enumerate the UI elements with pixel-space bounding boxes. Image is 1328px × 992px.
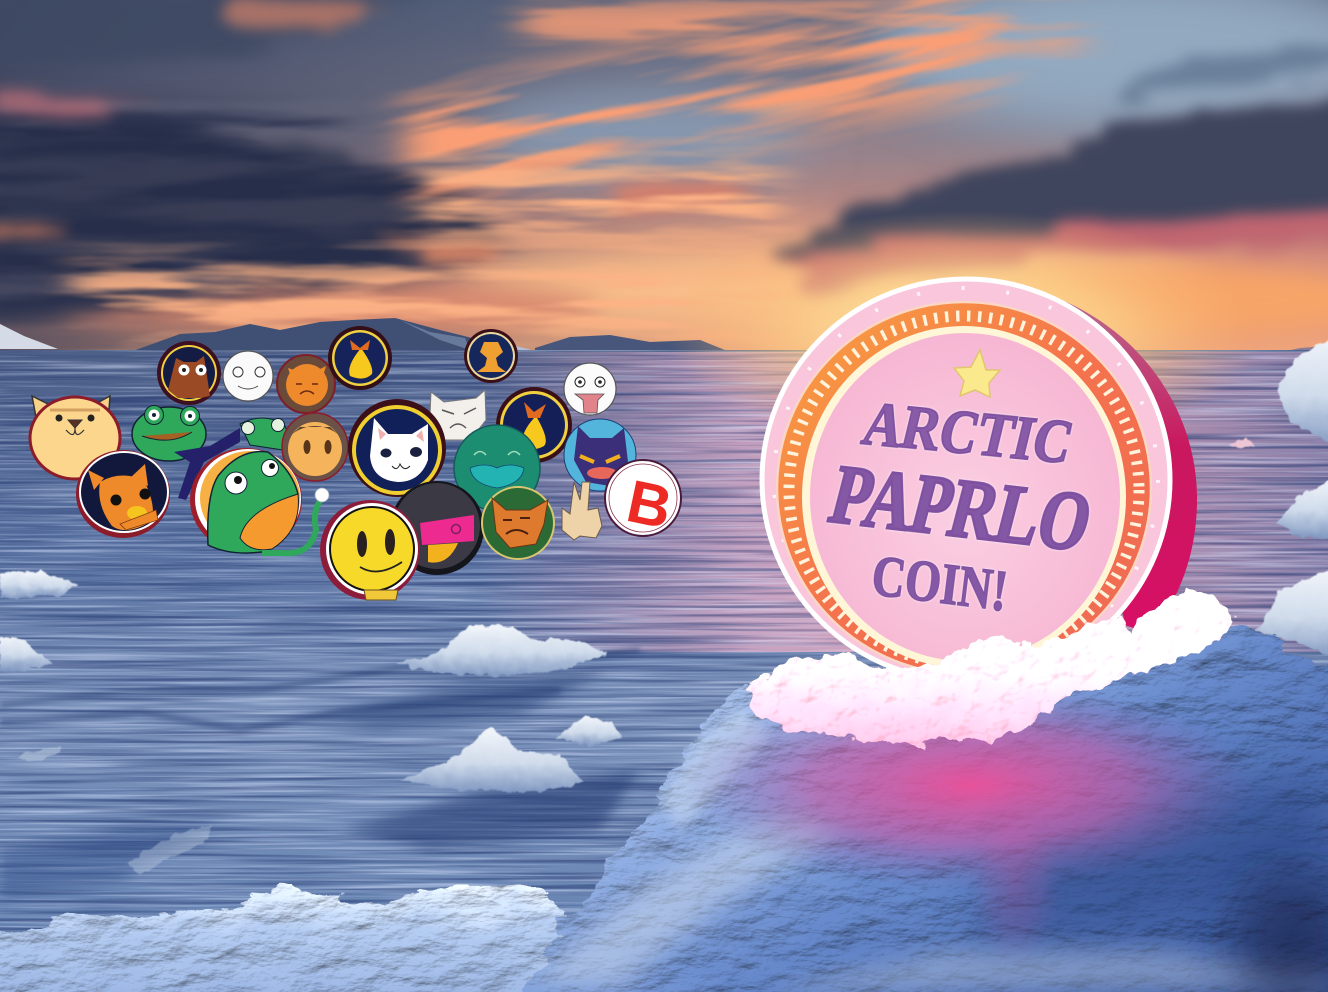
coin: bitcoin	[605, 460, 681, 542]
rim notches	[774, 288, 1158, 672]
ice chunks on right edge	[1256, 332, 1328, 660]
coin: white cat	[348, 399, 446, 497]
clouds: warm streaks centre, diagonal	[396, 0, 1006, 211]
clouds: warm blurred fields	[0, 2, 870, 260]
clouds: dark fibrous streaks left	[0, 100, 520, 320]
clouds: warm streaks upper middle	[520, 0, 1080, 46]
coin: green cat dog	[481, 486, 555, 560]
ice floes	[0, 437, 1254, 792]
clouds: dark right bank	[770, 92, 1328, 288]
sky background	[0, 0, 1328, 360]
sun glow behind coin	[665, 210, 1265, 450]
coin: big frog	[190, 448, 329, 553]
coin: blue cat	[564, 419, 636, 491]
coin: tongue face	[564, 363, 616, 415]
text: COIN!: COIN!	[868, 542, 1011, 623]
pink coin face	[810, 333, 1120, 661]
clouds: soft dark left bank	[0, 0, 1328, 312]
clouds: pale streaks along horizon	[70, 262, 790, 338]
coin: owl	[157, 341, 221, 405]
coin: bitcoin: B	[621, 467, 678, 542]
snow hill under coin	[495, 625, 1328, 992]
coin: green frog rear	[240, 418, 296, 452]
coin: grumpy white cat	[430, 390, 486, 440]
star	[954, 350, 1000, 397]
coin edge	[1040, 292, 1197, 634]
mountains on horizon	[0, 318, 1328, 362]
pink snow mound	[745, 582, 1237, 745]
coin: tan face	[282, 413, 348, 481]
small drift on sea	[125, 824, 214, 874]
frozen sea	[0, 350, 1328, 992]
coin: dark fox	[76, 450, 170, 538]
ring ticks	[789, 316, 1139, 664]
coin: teal smile	[454, 425, 540, 511]
coin: orange cat	[277, 355, 335, 413]
coin: green frog small	[132, 406, 206, 461]
text: ARCTIC: ARCTIC	[857, 389, 1080, 477]
coin: smiley	[320, 500, 420, 600]
coin rim	[762, 279, 1170, 681]
coin: navy pear	[496, 387, 572, 463]
text: PAPRLO: PAPRLO	[821, 449, 1101, 569]
coin: ninja	[390, 481, 484, 575]
coin: white face	[223, 351, 273, 401]
orange ring	[777, 302, 1151, 674]
meme coin cluster	[30, 326, 681, 600]
coin: yellow cat navy	[328, 326, 392, 390]
snow foreground: left drift	[0, 880, 660, 992]
icon: praying hands	[562, 482, 602, 540]
clouds: warm streaks low middle	[420, 160, 780, 240]
coin: chess piece	[464, 329, 518, 383]
cream inner ring	[802, 326, 1126, 668]
ribbon	[174, 428, 240, 500]
big pink coin	[762, 279, 1197, 681]
coin: cream dog	[30, 396, 120, 479]
